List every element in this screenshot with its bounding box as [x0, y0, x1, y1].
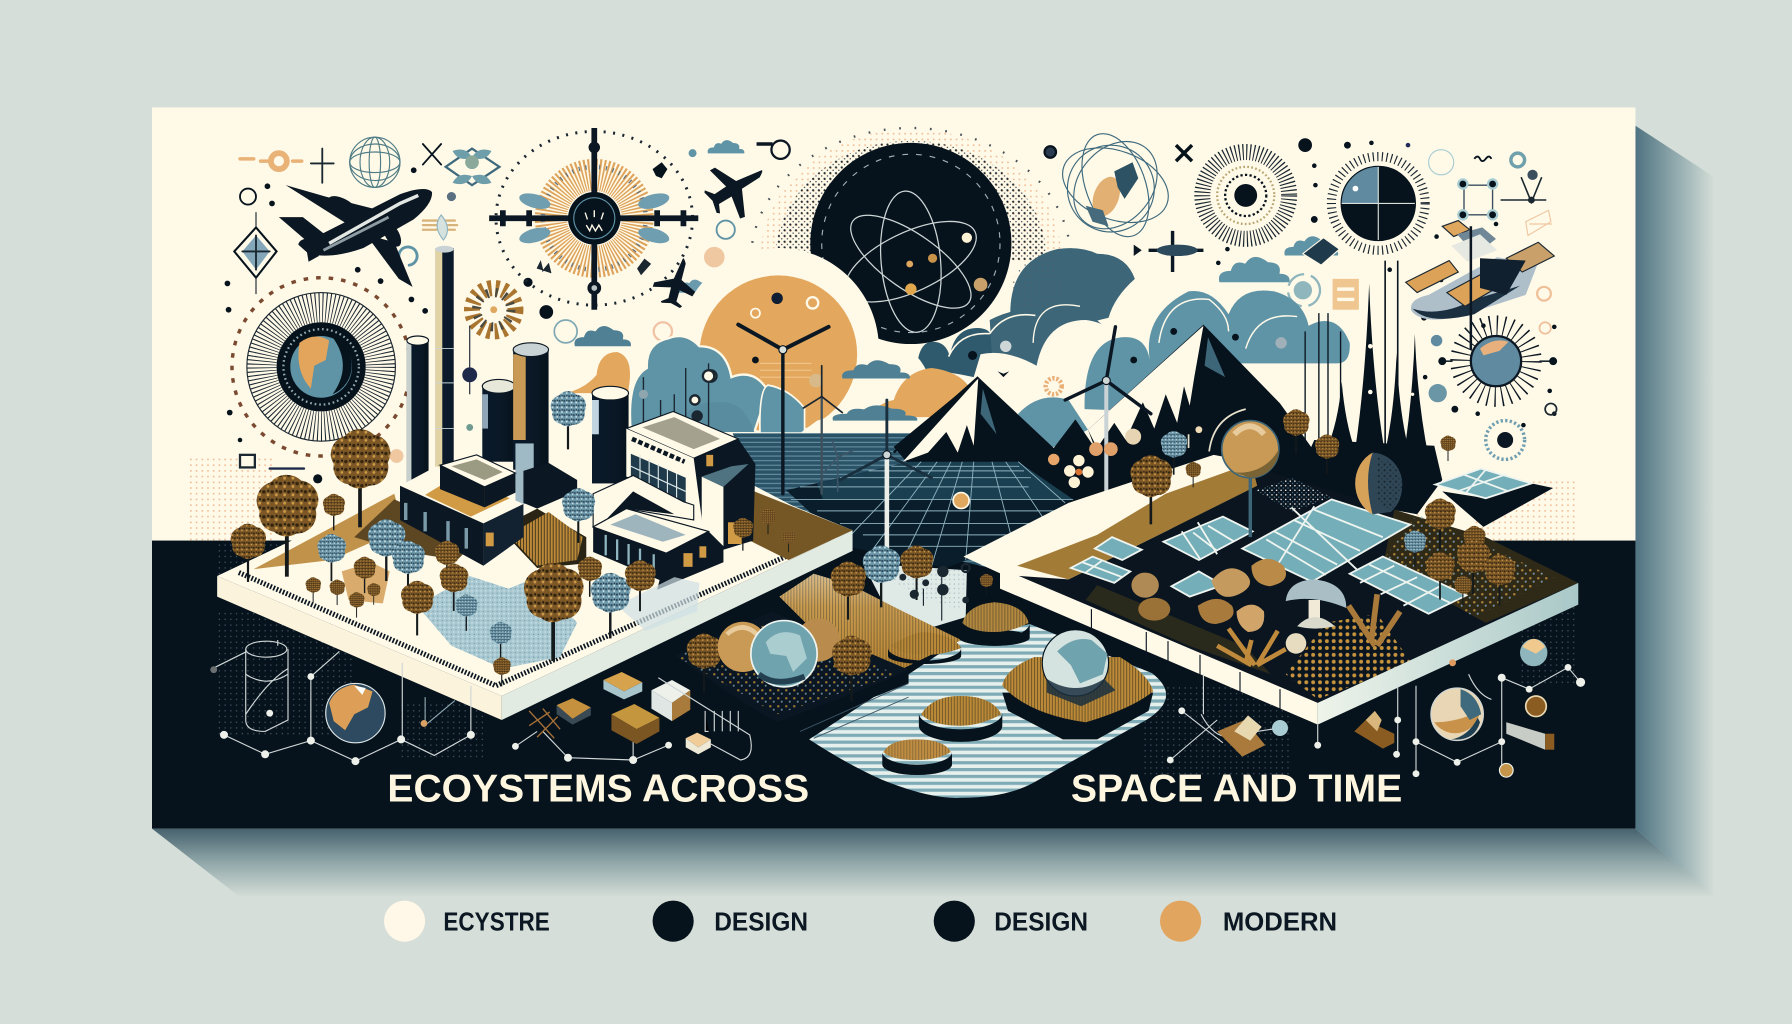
- legend: design two: [934, 901, 1088, 942]
- pond: [809, 624, 1166, 798]
- poster panel: [152, 107, 1635, 829]
- pond islands: [675, 602, 1153, 775]
- icon: large airplane: [279, 185, 432, 287]
- icon: sunburst flower: [472, 288, 515, 331]
- network: left diagrams: [210, 640, 475, 765]
- icon: isometric boxes: [512, 672, 751, 764]
- title: left: ECOYSTEMS ACROSS: [387, 768, 809, 811]
- icons: top-right cluster: [1045, 125, 1557, 427]
- icon: small planes and cloud: [648, 140, 790, 316]
- atom disc with halftone halo: [751, 128, 1071, 393]
- icons: top-left cluster: [225, 137, 691, 483]
- legend: design two: DESIGN: [994, 908, 1088, 936]
- clouds left of sun: [566, 336, 805, 433]
- icon: conifer forest: [1291, 261, 1442, 514]
- icon: spiky globe: [1429, 326, 1557, 459]
- globes on stems: [1222, 421, 1402, 537]
- panel shadow: [152, 126, 1714, 897]
- legend: modern: [1160, 901, 1337, 942]
- mountains: [894, 325, 1331, 577]
- icon: cloud and lattice ball: [554, 320, 672, 346]
- legend: modern: MODERN: [1223, 908, 1337, 936]
- icon: earth globe left: [326, 683, 385, 743]
- chimneys and tanks: [407, 246, 714, 504]
- factory buildings: [400, 411, 755, 631]
- network: right diagrams: [1167, 659, 1585, 777]
- left campus platform: [217, 411, 853, 720]
- legend: design one: [653, 901, 808, 942]
- campus trees: [231, 429, 795, 686]
- solar panels: [1071, 469, 1553, 614]
- sea: [733, 433, 1006, 571]
- icon: compass crosshair: [489, 128, 698, 310]
- clouds right of atom: [800, 248, 1350, 469]
- legend: ecystre: [384, 901, 550, 942]
- reed meadow: [779, 545, 993, 669]
- icon: right bottom devices and globes: [1217, 639, 1554, 757]
- platform trees right: [1048, 409, 1515, 605]
- solar field grid: [786, 462, 1073, 568]
- legend: design one: DESIGN: [714, 908, 808, 936]
- icon: drone and sky clouds: [1134, 231, 1359, 310]
- icon: spacecraft: [1406, 221, 1554, 350]
- right garden platform: [963, 455, 1578, 725]
- sun disc: [678, 248, 879, 449]
- chart: earth dial with hatch ring: [232, 278, 410, 456]
- mushroom and leaf cluster: [1131, 559, 1400, 665]
- icon: turbines: [738, 325, 1151, 549]
- title: right: SPACE AND TIME: [1071, 768, 1402, 811]
- legend: ecystre: ECYSTRE: [443, 908, 550, 936]
